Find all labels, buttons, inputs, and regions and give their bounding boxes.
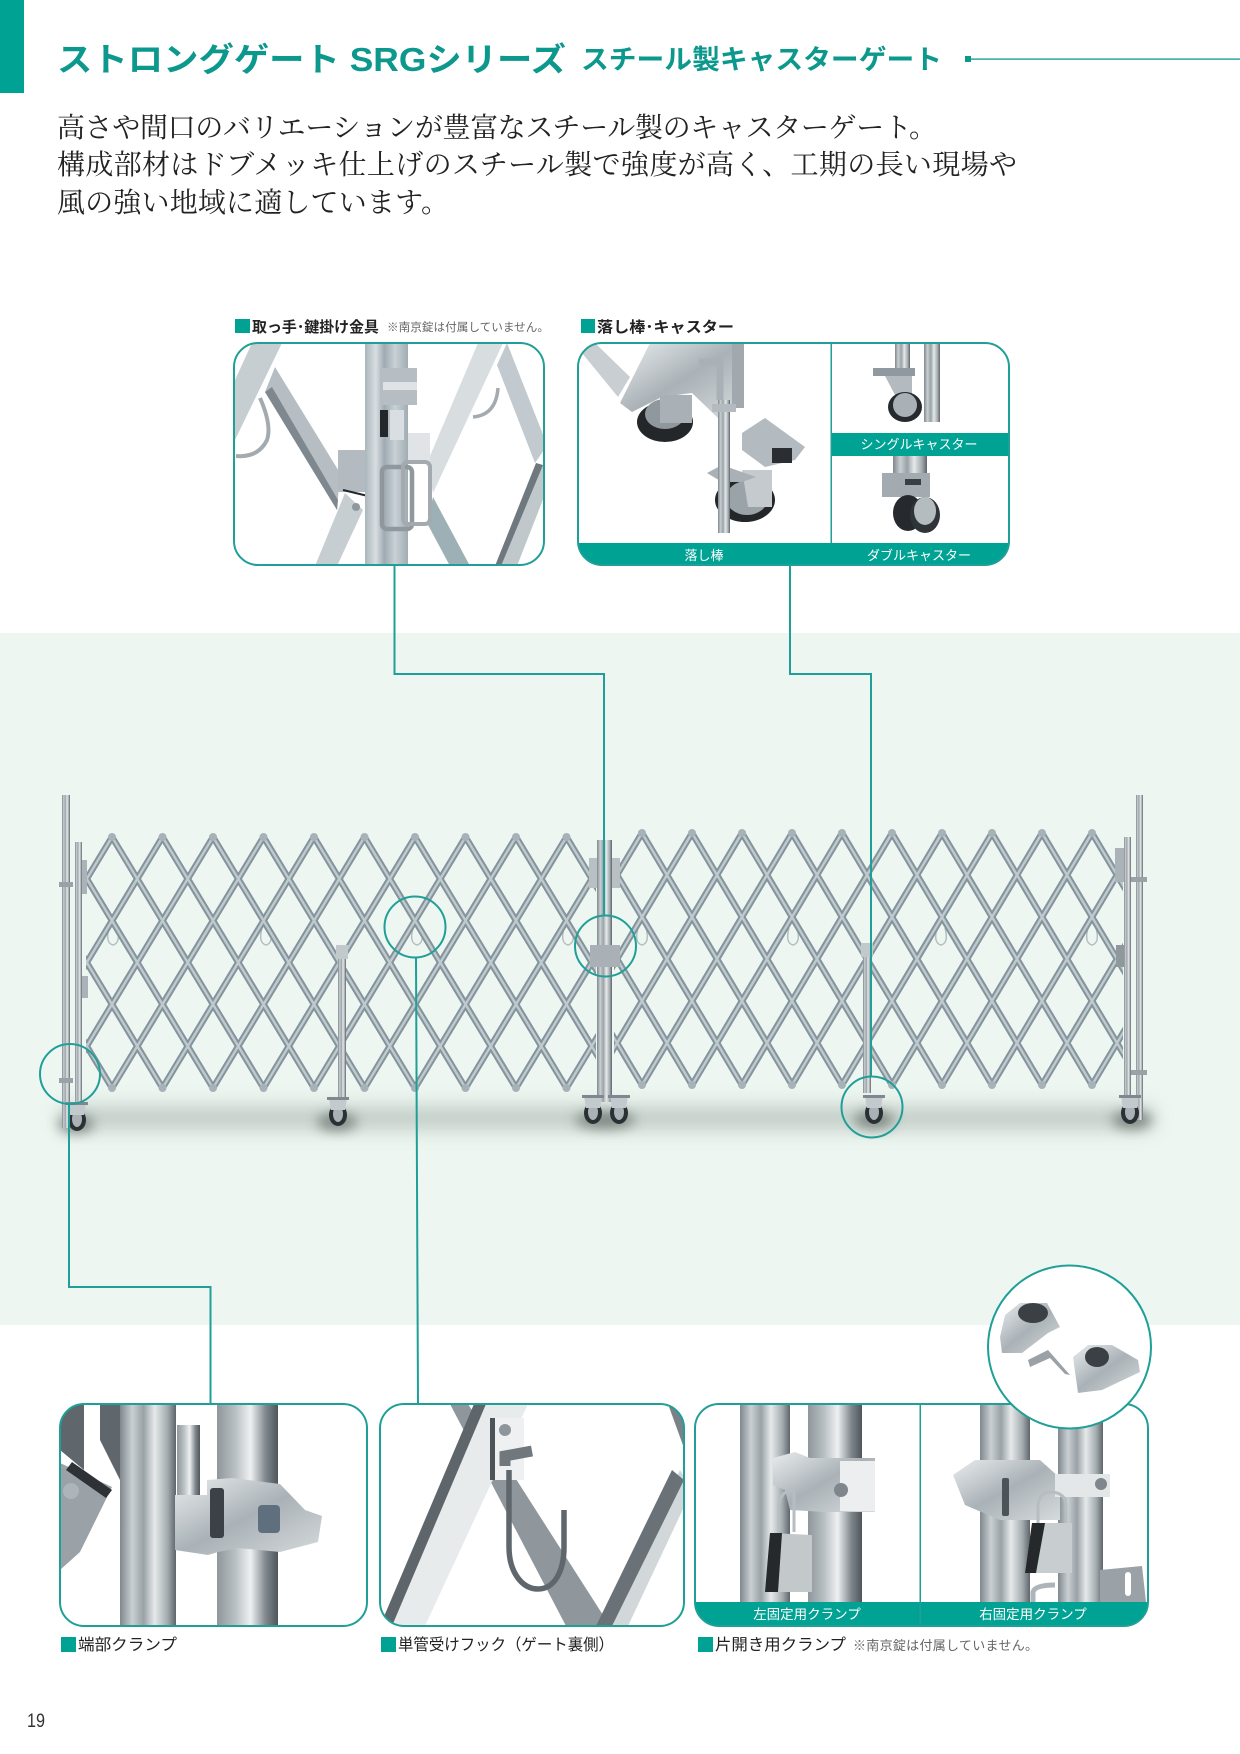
- right mid post: [861, 943, 885, 1124]
- label: handle and lock fitting: ※南京錠は付属していません。: [387, 320, 549, 334]
- left posts: [59, 795, 88, 1131]
- hanging hooks: [108, 928, 1097, 945]
- centre post: [582, 840, 630, 1124]
- title: [57, 41, 942, 78]
- band labels: [753, 1607, 1087, 1622]
- left mid post: [327, 945, 349, 1126]
- label: one-side opening clamp: 片開き用クランプ: [715, 1636, 846, 1654]
- label: handle and lock fitting: [235, 318, 549, 336]
- left lattice: [86, 833, 596, 1092]
- floor shadow: [58, 1108, 1152, 1133]
- panel: drop rod and casters: [578, 343, 1009, 565]
- label: pipe receiving hook: 単管受けフック（ゲート裏側）: [398, 1636, 614, 1654]
- leader lines: [69, 566, 871, 1404]
- header accent bar: [0, 0, 24, 93]
- gate illustration: [0, 795, 1240, 1133]
- title: スチール製キャスターゲート: [581, 45, 942, 75]
- panel: end clamp: [60, 1404, 367, 1626]
- band labels: 左固定用クランプ: [753, 1607, 861, 1622]
- intro text: 構成部材はドブメッキ仕上げのスチール製で強度が高く、工期の長い現場や: [57, 149, 1017, 181]
- panel: pipe receiving hook: [380, 1404, 692, 1626]
- label: one-side opening clamp: [698, 1636, 1038, 1654]
- label: end clamp: 端部クランプ: [78, 1636, 177, 1654]
- title: ストロングゲート SRGシリーズ: [57, 41, 566, 78]
- right lattice: [614, 829, 1123, 1089]
- panel: one-side opening clamps: [695, 1404, 1148, 1626]
- intro text: 高さや間口のバリエーションが豊富なスチール製のキャスターゲート。: [57, 112, 937, 144]
- intro text: [57, 112, 1017, 219]
- right posts: [1115, 795, 1147, 1124]
- page number: 19: [27, 1711, 45, 1732]
- background band: [0, 633, 1240, 1325]
- band labels: [684, 437, 978, 563]
- label: drop rod and casters: 落し棒･キャスター: [597, 319, 734, 336]
- title rule: [965, 56, 1240, 62]
- callout circles on gate: [40, 896, 902, 1138]
- band labels: ダブルキャスター: [867, 548, 971, 563]
- label: one-side opening clamp: ※南京錠は付属していません。: [853, 1638, 1038, 1653]
- panel: handle and lock fitting: [234, 343, 544, 566]
- label: handle and lock fitting: 取っ手･鍵掛け金具: [252, 318, 379, 336]
- band labels: シングルキャスター: [860, 437, 978, 452]
- intro text: 風の強い地域に適しています。: [57, 187, 449, 219]
- band labels: 落し棒: [684, 548, 724, 563]
- callout circle: clamp parts: [988, 1266, 1151, 1428]
- band labels: 右固定用クランプ: [979, 1607, 1087, 1622]
